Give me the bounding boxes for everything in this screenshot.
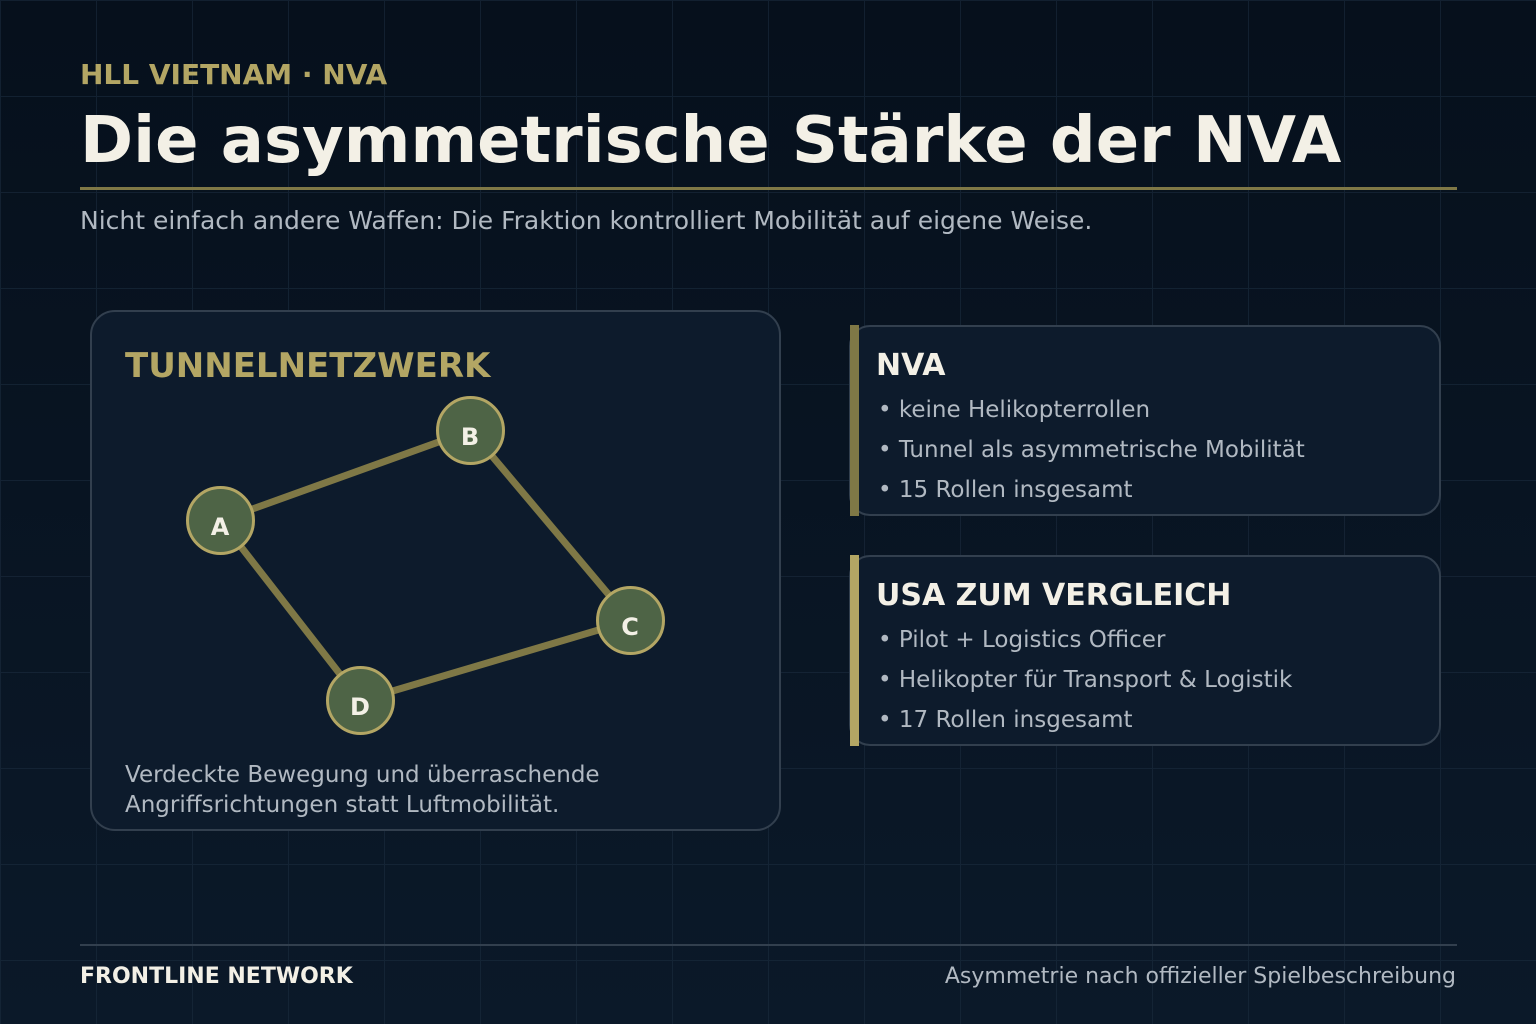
footer brand: FRONTLINE NETWORK [80,964,354,989]
card: NVA [850,325,1440,516]
eyebrow heading: HLL VIETNAM · NVA [80,58,387,91]
network diagram [188,398,664,734]
card: USA comparison [850,555,1440,746]
panel caption [125,762,600,818]
card list: • Pilot + Logistics Officer [878,627,1166,653]
panel heading: TUNNELNETZWERK [125,346,492,386]
network diagram: D [350,693,370,721]
title: Die asymmetrische Stärke der NVA [80,104,1342,178]
footer note: Asymmetrie nach offizieller Spielbeschreibung [945,964,1456,989]
network diagram: C [621,613,639,641]
card heading: USA ZUM VERGLEICH [876,578,1231,613]
card list: • 17 Rollen insgesamt [878,707,1132,733]
card list [878,397,1305,503]
panel caption: Verdeckte Bewegung und überraschende [125,762,600,788]
panel: tunnel network [91,311,780,830]
card list: • 15 Rollen insgesamt [878,477,1132,503]
card list [878,627,1293,733]
card list: • Helikopter für Transport & Logistik [878,667,1293,693]
card list: • keine Helikopterrollen [878,397,1150,423]
network diagram: B [461,423,479,451]
card list: • Tunnel als asymmetrische Mobilität [878,437,1305,463]
network diagram: A [211,513,230,541]
card heading: NVA [876,348,946,383]
panel caption: Angriffsrichtungen statt Luftmobilität. [125,792,559,818]
subtitle: Nicht einfach andere Waffen: Die Fraktion kontrolliert Mobilität auf eigene Weise. [80,206,1092,235]
